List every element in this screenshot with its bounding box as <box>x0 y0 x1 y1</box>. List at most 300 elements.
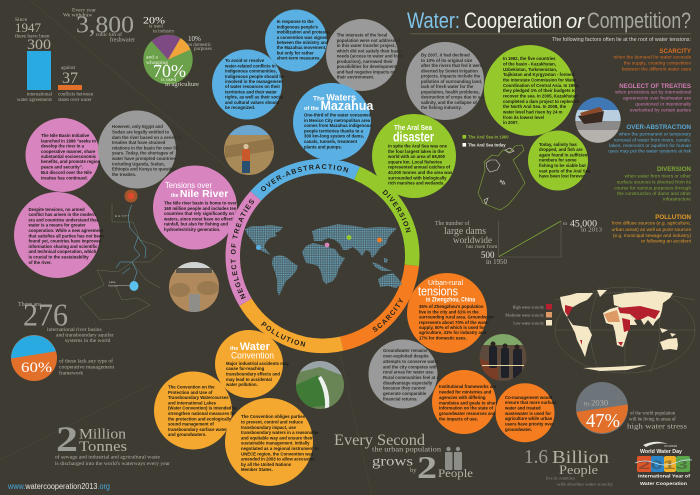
panel: Nile Basin Initiative circle: But discord over the Nile <box>41 170 92 175</box>
panel: Nile cooperation circle: and technical cooperation, which <box>28 249 97 254</box>
panel: Aral Sea decline circle: projects. Impacts include the <box>421 74 481 78</box>
ring labels: OVER-ABSTRACTION <box>261 164 348 192</box>
panel: Aral Sea today circle: fishing to be viable but <box>539 163 586 168</box>
stat: 1.6 billion people: 1.6 <box>524 446 548 468</box>
panel: Aral Sea decline circle: population, health problems, <box>421 89 480 94</box>
panel: Convention obligations circle: by all the United Nations <box>241 462 292 467</box>
stat: 1.6 billion people: live in countries <box>546 476 575 480</box>
panel: Mazahua - avoid conflicts circle: Indigenous people should be <box>225 74 285 79</box>
panel: Mazahua - avoid conflicts circle: involved in the management <box>225 79 283 84</box>
stat: 1.6 billion people: with absolute water scarcity <box>557 482 614 486</box>
panel: Aral Sea today circle: numbers for some <box>539 158 577 163</box>
panel: Aral Sea commission circle: from its lowest level <box>503 115 544 120</box>
stat: 1.6 billion people <box>524 446 614 486</box>
panel: Convention purpose circle: and International Lakes <box>168 400 217 405</box>
panel: groundwater circle: financial returns. <box>383 396 418 401</box>
panel: groundwater circle: attempts to conserve water, <box>383 359 440 364</box>
panel: institutional frameworks circle: groundwater resources and <box>439 411 496 416</box>
stat: 47% high water stress: 47% <box>586 410 620 432</box>
panel: Aral Sea commission circle: completed a dam project to replenish <box>503 99 580 104</box>
stat: large dams <box>435 218 602 266</box>
pie chart: 60% lack cooperation: cooperative management <box>59 364 115 370</box>
panel: The Water Convention <box>215 330 289 398</box>
heading: Urban-rural tensions in Zhengzhou, China: Urban-rural <box>428 280 463 287</box>
stat: 276 river basins: 276 <box>23 296 68 332</box>
panel: The Aral Sea disaster: 40,000 tonnes and the area was <box>388 170 453 175</box>
factor: pollution: POLLUTION <box>655 214 692 221</box>
map: Aral Sea outline <box>478 145 525 210</box>
panel: institutional frameworks circle: information on the state of <box>439 406 494 411</box>
stat: 300 international water agreements versus 37 conflicts: 1947 <box>15 20 42 35</box>
legend: water scarcity levels: High water scarcity <box>513 304 544 310</box>
panel: Nile cooperation circle: conflict has arisen in the modern <box>28 212 96 217</box>
panel: Aral Sea commission circle: recover the sea. In 2005, Kazakhstan <box>503 94 578 99</box>
panel: Mazahua - avoid conflicts circle: and cultural values should <box>225 100 280 105</box>
panel: Convention purpose circle: and groundwaters. <box>168 432 206 437</box>
panel: Convention obligations circle: and equitable way and ensure their <box>241 435 313 440</box>
panel: Nile legal entitlement circle: relations in the basin for over 50 <box>112 145 179 150</box>
stat: 276 river basins: international river basins <box>47 327 102 333</box>
factor: scarcity: between the different water uses <box>622 66 692 72</box>
factor: neglect of treaties: questioned or intentionally <box>635 102 692 108</box>
panel: Nile cooperation circle: found yet, countries have improved <box>28 239 101 244</box>
logo: World Water Day 2013: World Water Day <box>640 449 683 455</box>
stat: 300 international water agreements versus 37 conflicts: 300 <box>27 37 51 53</box>
legend: Aral Sea map: The Aral Sea in 1960 <box>468 134 509 140</box>
panel: Nile Basin Initiative circle: cooperative manner, share <box>41 149 96 154</box>
map: Nile basin: Lake <box>109 280 116 284</box>
panel: Urban-rural tensions in Zhengzhou: agriculture, 31% for industry and <box>419 330 486 335</box>
pie chart: 60% lack cooperation: 60% <box>21 360 52 376</box>
panel: Nile cooperation circle: information sharing and scientific <box>28 244 98 249</box>
panel: Convention obligations circle: UNECE region, the Convention was <box>241 451 314 456</box>
panel: The Water Convention: water pollution. <box>225 382 258 387</box>
panel: Mazahua - avoid conflicts circle: rights, as well as their social <box>225 95 283 100</box>
factor: scarcity: the supply, creating competition <box>624 60 691 66</box>
panel: Convention purpose circle: (Water Convention) is intended to <box>168 406 237 411</box>
factor: neglect of treaties <box>615 83 692 114</box>
stat: 300 international water agreements versus 37 conflicts: states over water <box>58 98 92 103</box>
panel: Convention obligations circle: transboundary waters in a reasonable <box>241 430 319 435</box>
panel: The Waters of the Mazahua: 300 km-long system of dams, <box>304 134 364 139</box>
panel: The Water Convention: Major industrial accidents may <box>226 361 289 366</box>
panel: Tensions over the Nile River: countries that rely significantly on its <box>164 211 241 216</box>
panel: Convention purpose circle: Protection and Use of <box>168 390 213 395</box>
heading: The Water Convention: the Water <box>230 341 271 353</box>
panel: Mazahua - local interests circle <box>326 19 403 91</box>
panel: Urban-rural tensions in Zhengzhou <box>407 273 495 353</box>
stat: 3,800 cubic km of freshwater <box>63 8 135 44</box>
panel: Mazahua - local interests circle: and had negative impacts on <box>337 69 396 74</box>
panel: institutional frameworks circle: the impacts of use. <box>439 416 478 421</box>
map: Nile basin: EGYPT <box>115 214 130 218</box>
logo: World Water Day 2013: UN WATER <box>664 445 677 448</box>
panel: The Waters of the Mazahua <box>293 83 374 161</box>
stat: large dams: to <box>563 221 568 227</box>
stat: 3,800 cubic km of freshwater: Every year <box>72 8 96 14</box>
panel: co-management circle: water and treated <box>504 405 541 410</box>
stat: 300 international water agreements versus 37 conflicts: conflicts between <box>58 92 94 98</box>
panel: Nile legal entitlement circle: including Uganda, Sudan, <box>112 161 165 166</box>
panel: Tensions over the Nile River: 160 million people and includes ten <box>164 206 237 211</box>
stat: 47% high water stress <box>576 382 687 434</box>
panel: groundwater circle: and the city competes with <box>383 364 438 369</box>
panel: Convention purpose circle: sound management of <box>168 422 214 427</box>
ring labels: POLLUTION <box>261 322 306 347</box>
factor: neglect of treaties: overlooked by certain parties <box>630 108 692 114</box>
stat: large dams: The number of <box>435 220 470 227</box>
factor: pollution: or following an accident <box>641 238 692 244</box>
panel: Nile legal entitlement circle: water have prompted countries <box>111 156 176 161</box>
heading: The Waters of the Mazahua: of the Mazahua <box>304 99 374 113</box>
panel: Tensions over the Nile River: waters, since most have no effective <box>163 216 239 221</box>
factor: over-abstraction: uses may put the water systems at risk <box>608 148 692 154</box>
panel: Mazahua - local interests circle: The interests of the local <box>337 32 387 38</box>
panel: co-management circle: agriculture while urban <box>505 416 553 421</box>
stat: urban population growth: Every Second <box>334 432 425 449</box>
factor: pollution: from diffuse sources (e.g. agriculture, <box>612 220 691 226</box>
panel: Mazahua - local interests circle: population were not addressed <box>337 38 401 43</box>
panel: Mazahua - avoid conflicts circle: territories and their water <box>225 89 277 94</box>
panel: The Aral Sea disaster: surrounded with biologically <box>388 175 447 180</box>
panel: Aral Sea decline circle: By 2007, it had declined <box>421 52 470 58</box>
panel: institutional frameworks circle: mandates and goals to share <box>439 400 499 405</box>
panel: Mazahua - avoid conflicts circle: indigenous communities, <box>225 69 277 74</box>
heading: The Waters of the Mazahua <box>304 92 374 113</box>
factor: scarcity: when the demand for water exceeds <box>614 54 692 60</box>
segment: diversion <box>357 173 412 265</box>
panel: The Water Convention: cause far-reaching <box>226 366 265 371</box>
panel: Nile legal entitlement circle <box>98 110 182 188</box>
map: global water scarcity <box>505 287 695 373</box>
panel: Nile legal entitlement circle: dam the river based on a series of <box>112 135 182 140</box>
stat: 276 river basins: There are <box>18 302 41 308</box>
stat: 300 international water agreements versus 37 conflicts: Since <box>15 17 28 23</box>
panel: Convention purpose circle: Transboundary Watercourses <box>168 395 229 400</box>
ring labels <box>230 164 411 347</box>
panel: groundwater circle: Rural communities feel at a <box>383 375 439 380</box>
legend: Aral Sea map: The Aral Sea today <box>468 142 506 148</box>
stat: 2 million tonnes: Tonnes <box>79 439 127 455</box>
panel: Mazahua - local interests circle: which did not satisfy their basic <box>336 48 402 53</box>
factor: over-abstraction <box>608 124 692 154</box>
heading: Urban-rural tensions in Zhengzhou, China: tensions <box>418 284 458 298</box>
legend: Aral Sea map <box>462 134 509 148</box>
segment: over-abstraction <box>256 166 357 196</box>
heading: The Water Convention: Convention <box>231 350 274 362</box>
stat: 3,800 cubic km of freshwater: We withdraw <box>63 12 92 18</box>
factor: diversion: the construction of dams and other <box>617 191 691 197</box>
panel: Aral Sea today circle: Today, salinity has <box>539 142 577 147</box>
panel: Aral Sea decline circle: salinity, and the collapse of <box>421 100 477 105</box>
stat: urban population growth: by <box>410 467 417 474</box>
stat: urban population growth <box>334 432 473 485</box>
ring: five water tension factors <box>226 158 420 354</box>
panel: Mazahua - avoid conflicts circle: water-related conflicts in <box>224 63 276 68</box>
logo: World Water Day 2013 <box>635 442 692 486</box>
panel: groundwater circle: over-exploited despite <box>383 354 429 359</box>
panel: Mazahua - convention circle: between the ministry and <box>277 40 329 45</box>
panel: Aral Sea commission circle: in 2007. <box>503 120 519 125</box>
pie chart: 60% lack cooperation: framework <box>59 370 83 376</box>
photo: river valley <box>296 361 344 409</box>
segment: neglect of treaties <box>233 196 256 302</box>
panel: co-management circle: Co-management would <box>505 395 553 400</box>
factor: diversion: when water from rivers or other <box>625 174 691 180</box>
panel: Aral Sea commission circle: In 1992, the five countries <box>503 56 556 61</box>
panel: Nile cooperation circle: is crucial to the sustainability <box>28 254 89 260</box>
factor: diversion <box>614 166 692 202</box>
panel: Convention purpose circle: strengthen national measures for <box>168 411 236 416</box>
map: Nile basin <box>80 190 163 320</box>
stat: urban population growth: grows <box>372 454 413 470</box>
panel: Nile cooperation circle: era and countries understand that <box>28 217 99 222</box>
panel: Mazahua - convention circle: the Mazahua movement, <box>277 45 326 50</box>
stat: 2 million tonnes: of sewage and industrial and agricultural waste <box>55 456 161 460</box>
stat: urban population growth: People <box>438 466 473 480</box>
panel: co-management circle: wastewater is used for <box>504 411 551 416</box>
panel: Nile cooperation circle <box>14 192 104 278</box>
stat: 276 river basins: and transboundary aquifer <box>56 332 114 338</box>
stat: 47% high water stress: high water stress <box>627 422 687 430</box>
panel: Urban-rural tensions in Zhengzhou: surrounding rural area. Groundwater <box>419 315 495 320</box>
panel: Tensions over the Nile River: hydroelectricity generation. <box>164 227 220 232</box>
panel: Mazahua - local interests circle: possibilities for development, <box>337 64 397 69</box>
pie chart: freshwater use: is used <box>161 77 176 83</box>
panel: Mazahua - convention circle: short-term measures. <box>277 56 321 61</box>
panel: Aral Sea decline circle: pollution of surrounding land, <box>421 79 482 84</box>
factor: diversion: course for various purposes through <box>614 186 691 192</box>
stat: large dams: in 1950 <box>486 258 507 266</box>
segment: scarcity <box>342 265 412 344</box>
panel: Mazahua - convention circle: mobilization and protests, <box>277 30 330 35</box>
panel: The Waters of the Mazahua: in Mexico City metropolitan area <box>304 118 371 123</box>
heading: Tensions over the Nile River: the Nile River <box>171 188 228 200</box>
panel: groundwater circle: because they cannot <box>383 386 426 391</box>
pie chart: freshwater use: whopping <box>146 60 168 66</box>
panel: Nile Basin Initiative circle: peace and security". <box>41 164 83 169</box>
panel: Convention obligations circle: transboundary impact, use <box>241 425 297 430</box>
panel: Nile cooperation circle: water is a means for greater <box>28 223 86 228</box>
panel: Aral Sea decline circle: after the rivers that fed it were <box>421 63 483 68</box>
legend: water tension factors <box>608 48 692 244</box>
legend: water scarcity levels: Low water scarcity <box>513 320 544 326</box>
panel: Aral Sea commission circle: Coordination of Central Asia. In 1994, <box>503 83 579 88</box>
factor: diversion: infrastructure <box>663 196 691 202</box>
stat: large dams: 45,000 <box>570 218 598 228</box>
subtitle: The following factors often lie at the root of water tensions: <box>552 37 691 43</box>
panel: Urban-rural tensions in Zhengzhou: represents about 70% of the water <box>419 320 489 325</box>
pie chart: freshwater use: 10% <box>188 35 201 43</box>
panel: Mazahua - local interests circle: in this water transfer project, <box>337 43 396 48</box>
photo: workers <box>479 334 527 382</box>
stat: 3,800 cubic km of freshwater: cubic km of <box>96 31 122 38</box>
panel: Nile legal entitlement circle: Ethiopia and Kenya to question <box>112 167 177 172</box>
legend: water scarcity levels: Moderate water scarcity <box>505 312 544 318</box>
panel: Urban-rural tensions in Zhengzhou: 35% of Zhengzhou's population <box>419 304 484 309</box>
panel: Mazahua - avoid conflicts circle: To avoid or resolve <box>225 58 265 63</box>
marker: Nile delta <box>124 190 138 202</box>
photo: Nile dam <box>169 262 219 312</box>
heading: Urban-rural tensions in Zhengzhou, China: in Zhengzhou, China <box>426 298 476 304</box>
pie chart: freshwater use: and a <box>146 54 158 60</box>
stat: 47% high water stress: By 2030 <box>584 398 608 408</box>
factor: diversion: surface sources is diverted from its <box>617 180 692 186</box>
panel: Mazahua - avoid conflicts circle <box>212 50 285 120</box>
panel: groundwater circle: Groundwater remains <box>383 348 428 353</box>
pie chart: freshwater use: 20% <box>143 16 165 26</box>
panel: Mazahua - avoid conflicts circle: be recognized. <box>225 105 255 110</box>
panel: Aral Sea decline circle <box>406 42 485 120</box>
stat: 300 international water agreements versus 37 conflicts: water agreements <box>17 98 52 103</box>
panel: Mazahua - local interests circle: needs (access to water and food <box>337 54 403 58</box>
stat: 276 river basins <box>18 296 114 344</box>
panel: The Waters of the Mazahua: comes from Mazahua indigenous <box>304 123 372 128</box>
heading: The Aral Sea disaster: disaster <box>393 128 434 144</box>
factor: over-abstraction: OVER-ABSTRACTION <box>626 124 692 131</box>
stat: 3,800 cubic km of freshwater: 3,800 <box>76 12 134 38</box>
panel: Aral Sea decline circle: diverted by Soviet irrigation <box>421 68 478 73</box>
panel: Nile Basin Initiative circle: treaties has continued. <box>41 176 88 180</box>
panel: Urban-rural tensions in Zhengzhou: supply, 50% of which is used for <box>419 325 485 330</box>
panel: The Water Convention: may lead to accidental <box>226 377 272 382</box>
factor: scarcity <box>614 48 692 72</box>
panel: Nile legal entitlement circle: However, only Egypt and <box>112 124 163 129</box>
panel: Convention obligations circle: amended in 2003 to allow accession <box>241 457 315 462</box>
factor: over-abstraction: removal of water from rivers, canals, <box>614 138 691 144</box>
heading: Tensions over the Nile River: Tensions over <box>165 181 212 190</box>
heading: The Waters of the Mazahua: The Waters <box>313 92 356 102</box>
factor: neglect of treaties: agreements over freshwater are <box>623 96 691 102</box>
panel: The Waters of the Mazahua: plants and pumps. <box>304 144 342 149</box>
heading: Tensions over the Nile River <box>165 181 228 200</box>
panel: Nile legal entitlement circle: treaties that have strained <box>112 140 166 145</box>
panel: Nile cooperation circle: cooperation. While a new agreement <box>28 228 104 233</box>
pie chart: freshwater use: is used <box>149 24 163 30</box>
pie chart: freshwater use <box>143 16 212 88</box>
stat: large dams: worldwide <box>453 236 492 246</box>
panel: Aral Sea commission circle: the Interstate Commission for Water <box>503 78 577 83</box>
panel: Convention obligations circle: sustainable management. Initially <box>241 441 310 446</box>
pie chart: freshwater use: purposes <box>194 47 212 52</box>
title <box>407 8 691 33</box>
logo: World Water Day 2013: 2013 <box>638 458 689 472</box>
stat: 300 international water agreements versus 37 conflicts <box>15 17 94 103</box>
panel: The Aral Sea disaster: In spite the Aral Sea was one <box>388 144 448 148</box>
panel: Aral Sea today circle <box>528 130 591 190</box>
panel: The Aral Sea disaster: rich marshes and wetlands. <box>388 181 444 186</box>
stat: 3,800 cubic km of freshwater: freshwater <box>110 36 135 44</box>
stat: large dams: 500 <box>481 250 495 260</box>
panel: The Waters of the Mazahua: One-third of the water consumed <box>304 112 372 118</box>
panel: Mazahua - convention circle: a convention was signed <box>277 35 328 40</box>
factor: diversion: DIVERSION <box>657 166 692 173</box>
photo: desert worker <box>224 125 275 175</box>
panel: Aral Sea decline circle: to 10% of its original size <box>421 58 473 63</box>
panel: Urban-rural tensions in Zhengzhou: live in the city and 61% in the <box>419 309 479 314</box>
panel: Convention purpose circle: The Convention on the <box>168 384 215 390</box>
panel: institutional frameworks circle: agencies with differing <box>439 395 486 400</box>
panel: Aral Sea commission circle: they pledged 1% of their budgets to <box>503 88 576 93</box>
panel: Nile cooperation circle: that satisfies all parties has not been <box>28 233 104 238</box>
panel: Convention purpose circle <box>154 372 237 450</box>
panel: Aral Sea commission circle: the North Aral Sea. In 2008, the <box>503 104 567 109</box>
panel: Nile Basin Initiative circle <box>26 118 104 192</box>
panel: Aral Sea today circle: vast parts of the Aral Sea <box>539 168 591 173</box>
factor: neglect of treaties: when provisions set by international <box>615 90 691 96</box>
stat: 2 million tonnes: 2 <box>56 419 78 459</box>
pie chart: 60% lack cooperation <box>11 335 115 381</box>
panel: Mazahua - avoid conflicts circle: of water resources on their <box>225 84 280 89</box>
stat: urban population growth: the urban population <box>372 446 442 454</box>
segment: pollution <box>246 302 342 346</box>
panel: co-management circle: groundwater. <box>505 427 532 432</box>
panel: Nile legal entitlement circle: years. Today, the shortages of <box>112 151 174 156</box>
stat: 300 international water agreements versus 37 conflicts: there have been <box>15 34 50 40</box>
panel: Aral Sea commission circle: of the basin - Kazakhstan, <box>503 62 556 67</box>
line chart: dam growth <box>498 221 561 257</box>
factor: over-abstraction: lakes, reservoirs or aquifers for human <box>609 143 691 149</box>
panel: groundwater circle: rural areas for water use. <box>383 370 434 375</box>
stat: 276 river basins: systems in the world <box>65 338 111 344</box>
panel: Nile Basin Initiative circle: launched in 1999 "seeks to <box>41 138 96 143</box>
stat: large dams: large dams <box>444 226 486 237</box>
panel: Aral Sea decline circle: the fishing industry. <box>421 105 462 110</box>
pie chart: freshwater use: in industry <box>153 30 175 34</box>
panel: institutional frameworks circle: Institutional frameworks are <box>439 384 497 389</box>
panel: Convention obligations circle: Member States. <box>241 467 273 472</box>
pie chart: freshwater use: 70% <box>153 61 186 81</box>
factor: pollution: (e.g. municipal sewage and industry) <box>613 233 691 239</box>
panel: Convention purpose circle: the protection and ecologically <box>168 416 232 421</box>
panel: co-management circle: ensure that more surface <box>505 400 557 405</box>
pie chart: 60% lack cooperation: of these lack any type of <box>59 358 113 364</box>
ring labels: NEGLECT OF TREATIES <box>230 199 254 300</box>
panel: Nile cooperation circle: of the river. <box>28 260 52 265</box>
stat: 47% high water stress: of the world population <box>630 412 676 416</box>
stat: 47% high water stress: will be living in areas of <box>629 418 676 422</box>
panel: Mazahua - local interests circle: their environment. <box>337 74 374 80</box>
panel: institutional frameworks circle <box>432 370 499 434</box>
panel: Nile Basin Initiative circle: substantial socioeconomic <box>41 154 97 159</box>
url: www.watercooperation2013.org <box>7 482 110 491</box>
panel: Nile legal entitlement circle: Sudan are legally entitled to <box>112 130 169 134</box>
panel: Tensions over the Nile River: The Nile river basin is home to over <box>164 200 237 206</box>
factor: scarcity: SCARCITY <box>659 48 692 55</box>
photo: stranded ship <box>575 97 621 144</box>
panel: Convention obligations circle: The Convention obliges parties <box>241 414 306 419</box>
logo: World Water Day 2013: International Year of <box>638 474 691 478</box>
panel: Mazahua - convention circle: In response to the <box>277 19 314 24</box>
panel: co-management circle: users have priority over <box>505 421 554 426</box>
icon: two people <box>445 447 462 470</box>
heading: Urban-rural tensions in Zhengzhou, China <box>418 280 476 304</box>
panel: Tensions over the Nile River: rainfall, but also for fishing and <box>164 222 228 227</box>
panel: The Waters of the Mazahua: people territories thanks to a <box>304 128 364 133</box>
panel: Mazahua - convention circle: indigenous people's <box>277 24 319 29</box>
panel: groundwater circle <box>368 340 440 408</box>
heading: The Aral Sea disaster: The Aral Sea <box>394 123 433 132</box>
panel: Urban-rural tensions in Zhengzhou: 17% for domestic uses. <box>419 335 467 340</box>
stat: large dams: has risen from <box>466 243 498 250</box>
title: or <box>566 11 585 33</box>
map: dotted world map in ring <box>245 224 402 296</box>
panel: The Aral Sea disaster <box>372 114 456 198</box>
factor: pollution: urban areas) as well as point sources <box>612 227 692 233</box>
logo: World Water Day 2013: Water Cooperation <box>640 481 687 486</box>
panel: Mazahua - local interests circle: production), narrowed their <box>337 59 393 64</box>
panel: The Water Convention: transboundary effects and <box>226 372 280 376</box>
